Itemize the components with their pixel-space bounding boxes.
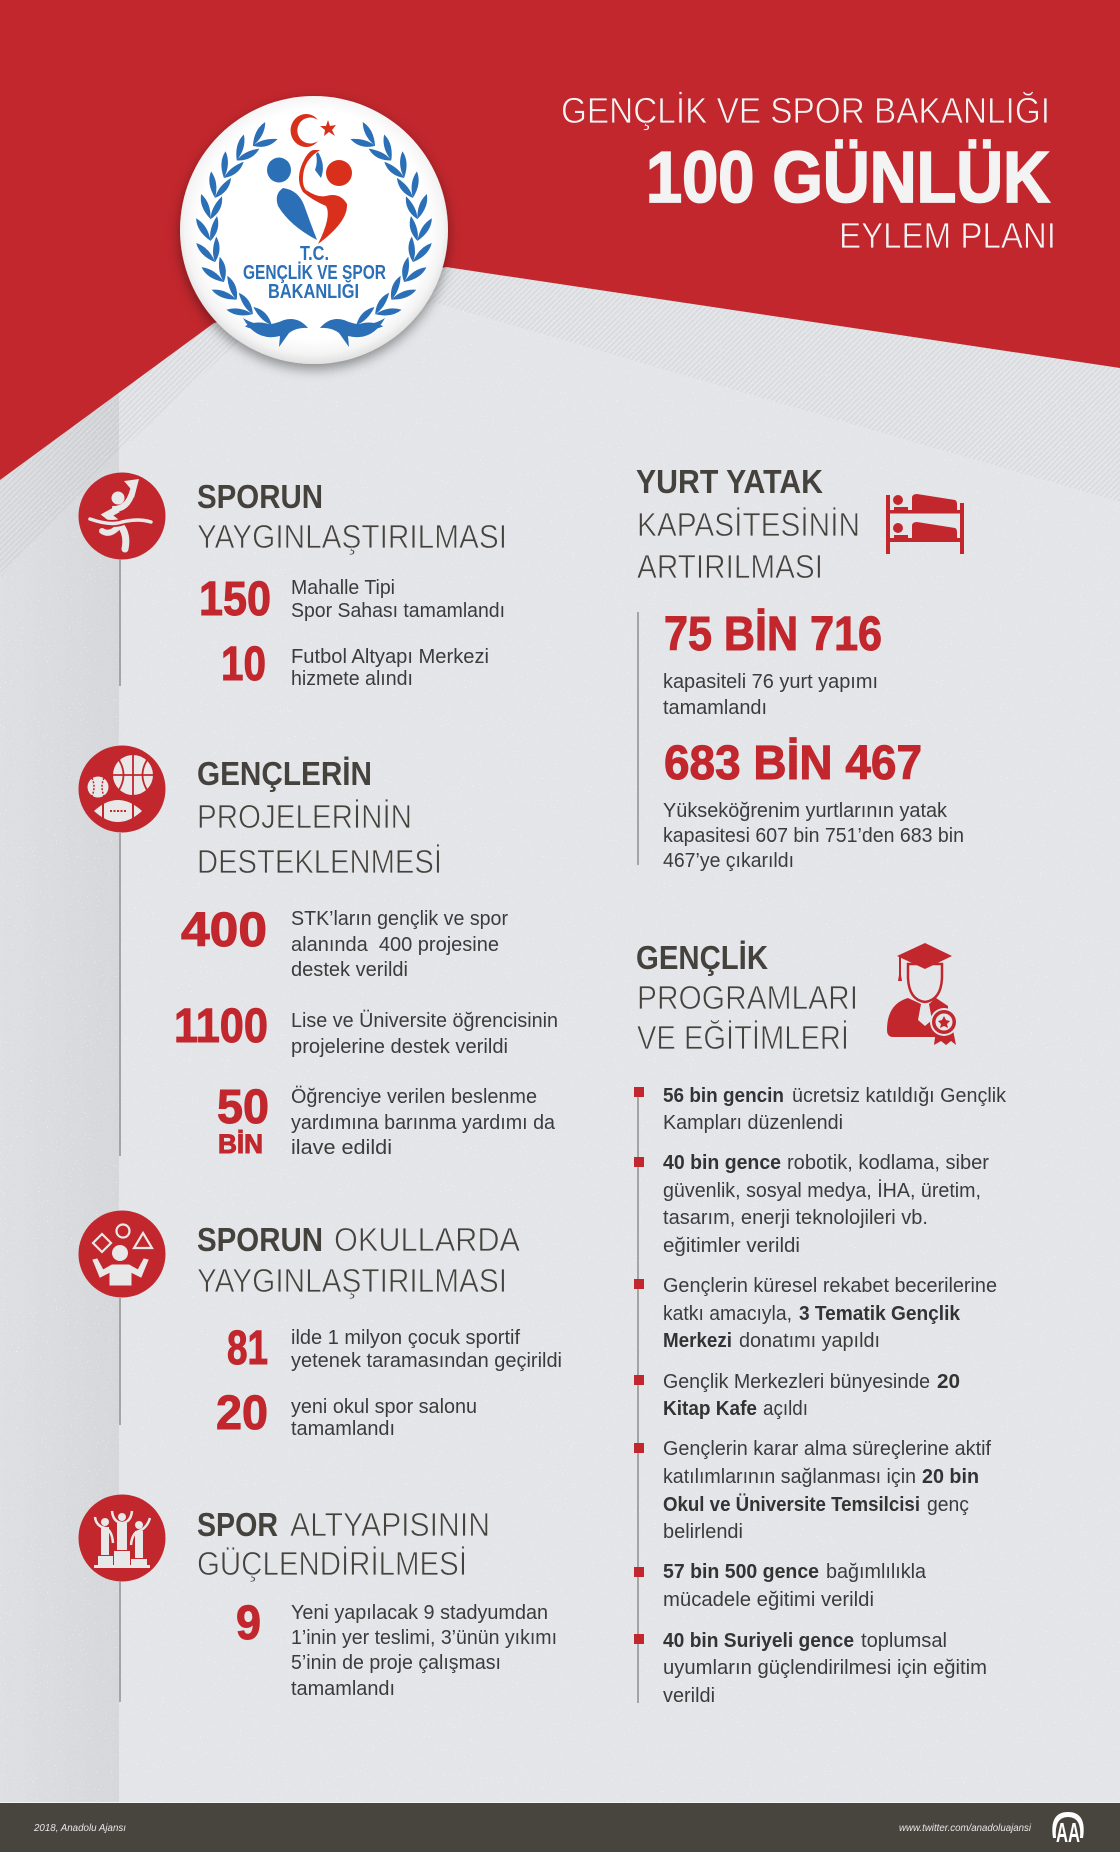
bullet item: tematik gençlik merkezi: donatımı yapıldı xyxy=(739,1330,880,1352)
heading: PROJELERİNİN xyxy=(197,798,412,835)
panel: sporun okullarda yaygınlaştırılması xyxy=(78,1210,562,1440)
stat: 10: hizmete alındı xyxy=(291,668,413,690)
stat: 400: destek verildi xyxy=(291,959,408,981)
heading: ARTIRILMASI xyxy=(637,548,823,585)
stat: 9: 1’inin yer teslimi, 3’ünün yıkımı xyxy=(291,1627,557,1649)
stat: 50 bin xyxy=(217,1081,556,1159)
bullet item: temsilci: katılımlarının sağlanması için xyxy=(663,1466,916,1488)
stat: 1100: Lise ve Üniversite öğrencisinin xyxy=(291,1010,558,1032)
bullet item: suriyeli gençler xyxy=(634,1630,987,1707)
heading: DESTEKLENMESİ xyxy=(197,843,442,880)
heading xyxy=(197,1221,520,1299)
stat: 20: tamamlandı xyxy=(291,1418,395,1440)
title: EYLEM PLANI xyxy=(839,215,1056,256)
bullet item: gençlik kampları xyxy=(634,1085,1007,1134)
heading xyxy=(197,1506,490,1582)
bullet item: temsilci: Okul ve Üniversite Temsilcisi xyxy=(663,1493,920,1516)
bullet item: bağımlılıkla mücadele xyxy=(634,1561,927,1611)
heading: GENÇLİK xyxy=(636,939,768,976)
heading: KAPASİTESİNİN xyxy=(637,506,860,543)
stat: 150: Mahalle Tipi xyxy=(291,577,395,599)
bullet item: tematik gençlik merkezi: katkı amacıyla, xyxy=(663,1303,792,1325)
stat: 9: 9 xyxy=(236,1597,261,1650)
stat: 20: 20 xyxy=(216,1387,268,1440)
bullet item: teknoloji eğitimleri: robotik, kodlama, siber xyxy=(787,1152,989,1174)
bullet item: temsilci: genç xyxy=(927,1494,969,1516)
stat: 150 xyxy=(199,573,505,626)
bullet item: tematik gençlik merkezi xyxy=(634,1275,997,1352)
bullet item: bağımlılıkla mücadele: 57 bin 500 gence xyxy=(663,1561,819,1583)
bullet item: teknoloji eğitimleri: eğitimler verildi xyxy=(663,1235,800,1257)
bullet item: temsilci: 20 bin xyxy=(922,1466,979,1488)
heading: YAYGINLAŞTIRILMASI xyxy=(197,518,507,555)
bullet item: temsilci: Gençlerin karar alma süreçlerine aktif xyxy=(663,1438,991,1460)
stat: 81: ilde 1 milyon çocuk sportif xyxy=(291,1327,520,1349)
panel: gençlik programları ve eğitimleri xyxy=(634,939,1007,1707)
icon: bunk bed xyxy=(886,494,964,554)
stat: 150: Spor Sahası tamamlandı xyxy=(291,600,505,622)
bullet item: suriyeli gençler: verildi xyxy=(663,1685,715,1707)
panel: yurt yatak kapasitesi xyxy=(636,463,964,872)
bullet item: teknoloji eğitimleri: güvenlik, sosyal medya, İHA, üretim, xyxy=(663,1179,981,1202)
heading: SPORUN xyxy=(197,478,323,515)
logo badge: T.C. xyxy=(300,243,329,265)
bullet item: gençlik kampları: Kampları düzenlendi xyxy=(663,1112,843,1134)
logo badge xyxy=(180,96,448,364)
bullet item: bağımlılıkla mücadele: bağımlılıkla xyxy=(826,1561,927,1583)
heading: YAYGINLAŞTIRILMASI xyxy=(197,1262,507,1299)
bullet item: teknoloji eğitimleri: tasarım, enerji teknolojileri vb. xyxy=(663,1207,928,1229)
stat: 81: 81 xyxy=(227,1322,268,1375)
heading: SPOR xyxy=(197,1506,278,1543)
bullet item: temsilci: belirlendi xyxy=(663,1521,743,1543)
stat: 10: Futbol Altyapı Merkezi xyxy=(291,646,489,668)
heading: GENÇLERİN xyxy=(197,755,372,792)
title xyxy=(561,90,1056,256)
stat: 75 bin 716: 75 BİN 716 xyxy=(664,608,882,661)
stat: 400 xyxy=(181,904,508,981)
stat: 50 bin: BİN xyxy=(218,1129,263,1159)
bullet item: suriyeli gençler: uyumların güçlendirilmesi için eğitim xyxy=(663,1657,987,1679)
stat: 75 bin 716 xyxy=(663,608,882,719)
bullet item: tematik gençlik merkezi: 3 Tematik Gençlik xyxy=(799,1303,961,1325)
bullet item: kitap kafe: açıldı xyxy=(763,1398,808,1420)
stat: 75 bin 716: tamamlandı xyxy=(663,697,767,719)
panel: sporun yaygınlaştırılması xyxy=(78,472,507,691)
stat: 9: tamamlandı xyxy=(291,1678,395,1700)
stat: 20 xyxy=(216,1387,477,1440)
stat: 1100: 1100 xyxy=(174,1000,268,1053)
bullet item: kitap kafe: Gençlik Merkezleri bünyesinde xyxy=(663,1371,930,1393)
heading: SPORUN xyxy=(197,1221,323,1258)
stat: 150: 150 xyxy=(199,573,271,626)
stat: 683 bin 467: 683 BİN 467 xyxy=(664,737,922,790)
stat: 9: Yeni yapılacak 9 stadyumdan xyxy=(291,1602,548,1624)
stat: 20: yeni okul spor salonu xyxy=(291,1396,477,1418)
heading: ALTYAPISININ xyxy=(290,1506,490,1543)
bullet item: gençlik kampları: 56 bin gencin xyxy=(663,1085,784,1107)
icon: juggling person xyxy=(78,1210,166,1298)
stat: 81 xyxy=(227,1322,562,1375)
stat: 50 bin: 50 xyxy=(217,1081,269,1134)
bullet item: teknoloji eğitimleri xyxy=(634,1152,989,1257)
bullet item: teknoloji eğitimleri: 40 bin gence xyxy=(663,1152,781,1174)
stat: 400: alanında 400 projesine xyxy=(291,934,499,956)
title: 100 GÜNLÜK xyxy=(646,138,1050,218)
footer xyxy=(0,1802,1120,1852)
icon: podium xyxy=(78,1494,166,1582)
logo badge: GENÇLİK VE SPOR xyxy=(243,261,386,284)
bullet item: kitap kafe xyxy=(634,1371,960,1420)
heading: OKULLARDA xyxy=(334,1221,520,1258)
stat: 683 bin 467: Yükseköğrenim yurtlarının yatak xyxy=(663,800,948,822)
heading xyxy=(197,478,507,555)
footer: 2018, Anadolu Ajansı xyxy=(33,1822,126,1834)
icon: graduate with medal xyxy=(887,943,958,1045)
stat: 50 bin: yardımına barınma yardımı da xyxy=(291,1112,556,1134)
stat: 50 bin: Öğrenciye verilen beslenme xyxy=(291,1086,537,1108)
heading xyxy=(197,755,442,880)
heading xyxy=(636,939,858,1056)
icon: AA logo xyxy=(1052,1812,1084,1848)
stat: 81: yetenek taramasından geçirildi xyxy=(291,1350,562,1372)
heading: GÜÇLENDİRİLMESİ xyxy=(197,1545,467,1582)
icon: balls xyxy=(78,746,166,832)
stat: 9: 5’inin de proje çalışması xyxy=(291,1652,501,1674)
stat: 75 bin 716: kapasiteli 76 yurt yapımı xyxy=(663,671,878,693)
stat: 1100 xyxy=(174,1000,558,1058)
heading: YURT YATAK xyxy=(636,463,823,500)
bullet item: kitap kafe: Kitap Kafe xyxy=(663,1398,757,1420)
stat: 683 bin 467: 467’ye çıkarıldı xyxy=(663,850,794,872)
stat: 10 xyxy=(221,638,489,691)
title: GENÇLİK VE SPOR BAKANLIĞI xyxy=(561,90,1050,131)
panel: gençlerin projelerinin desteklenmesi xyxy=(78,746,558,1159)
bullet item: suriyeli gençler: toplumsal xyxy=(861,1630,947,1652)
stat: 1100: projelerine destek verildi xyxy=(291,1036,508,1058)
red header shape xyxy=(0,0,1120,480)
stat: 683 bin 467: kapasitesi 607 bin 751’den 683 bin xyxy=(663,825,964,847)
stat: 9 xyxy=(236,1597,557,1700)
panel: spor altyapısının güçlendirilmesi xyxy=(78,1494,557,1702)
icon: AA logo: AA xyxy=(1056,1817,1080,1848)
bullet item: kitap kafe: 20 xyxy=(937,1371,960,1393)
stat: 10: 10 xyxy=(221,638,266,691)
logo badge: BAKANLIĞI xyxy=(268,279,359,303)
bullet item: bağımlılıkla mücadele: mücadele eğitimi verildi xyxy=(663,1589,874,1611)
stat: 683 bin 467 xyxy=(663,737,964,872)
stat: 50 bin: ilave edildi xyxy=(291,1137,392,1159)
heading xyxy=(636,463,860,585)
heading: PROGRAMLARI xyxy=(637,979,858,1016)
stat: 400: 400 xyxy=(181,904,267,957)
stat: 400: STK’ların gençlik ve spor xyxy=(291,908,508,930)
heading: VE EĞİTİMLERİ xyxy=(637,1019,849,1056)
bullet item: suriyeli gençler: 40 bin Suriyeli gence xyxy=(663,1630,854,1652)
bullet item: gençlik kampları: ücretsiz katıldığı Gençlik xyxy=(792,1085,1007,1107)
bullet item: temsilci xyxy=(634,1438,991,1543)
footer: www.twitter.com/anadoluajansi xyxy=(899,1822,1032,1834)
icon: runner at finish line xyxy=(78,472,166,560)
bullet item: tematik gençlik merkezi: Gençlerin küresel rekabet becerilerine xyxy=(663,1275,997,1297)
bullet item: tematik gençlik merkezi: Merkezi xyxy=(663,1330,732,1352)
